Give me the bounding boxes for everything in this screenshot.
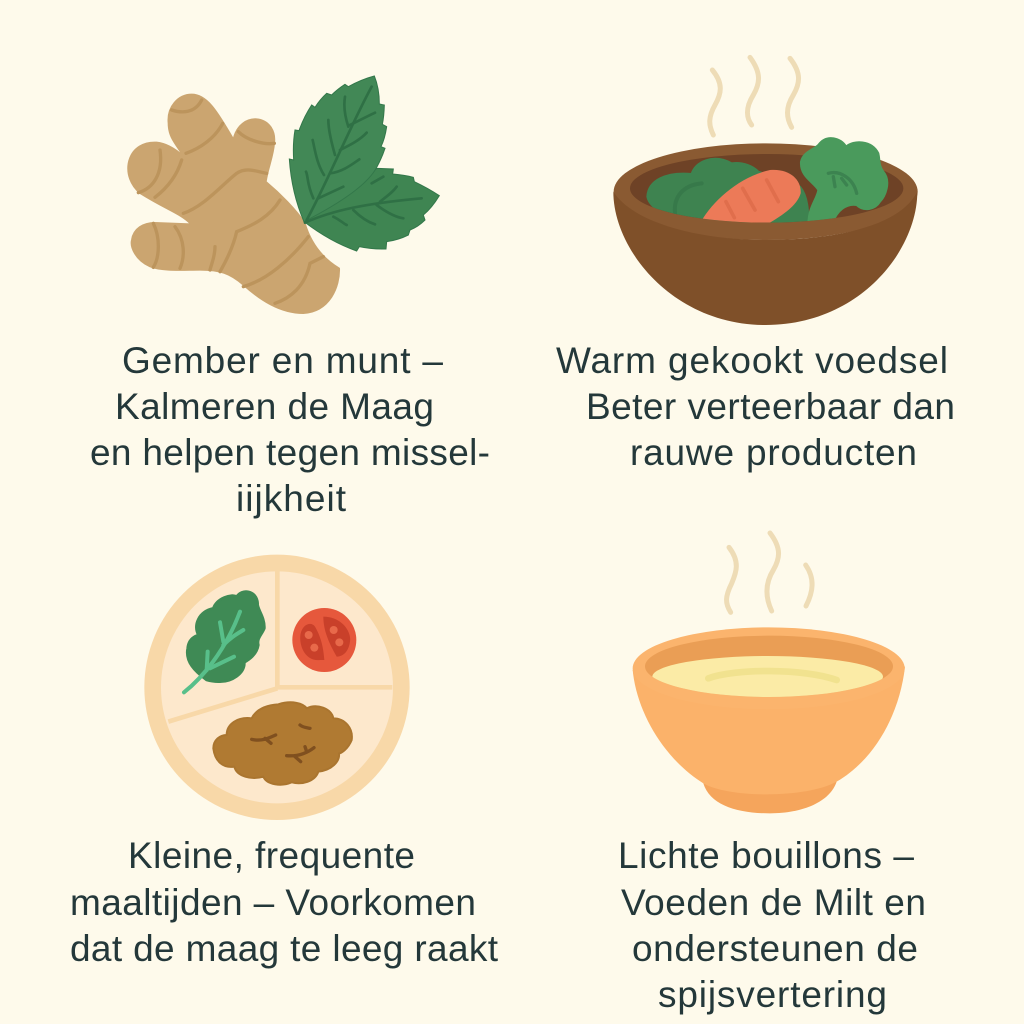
foot <box>703 782 837 813</box>
leaf <box>184 592 264 692</box>
plate <box>144 555 410 820</box>
broth <box>652 656 883 697</box>
text: ginger and mint: iijkheit <box>236 478 347 519</box>
mint leaves <box>289 76 439 251</box>
text: light broths <box>618 835 926 1015</box>
icon: bowl of warm cooked food <box>613 57 918 325</box>
bowl body <box>613 192 917 325</box>
text: warm cooked food <box>556 340 955 473</box>
text: ginger and mint: en helpen tegen missel- <box>90 432 490 473</box>
rim and inside <box>633 627 905 709</box>
text: small frequent meals <box>70 835 499 969</box>
ginger root <box>128 94 339 313</box>
text: light broths: Lichte bouillons – <box>618 835 914 876</box>
text: ginger and mint: Kalmeren de Maag <box>115 386 434 427</box>
steam <box>710 57 799 135</box>
steam <box>727 533 812 612</box>
icon: ginger and mint <box>128 76 439 313</box>
text: light broths: ondersteunen de <box>632 928 918 969</box>
body <box>633 667 905 794</box>
text: small frequent meals: maaltijden – Voorkomen <box>70 882 476 923</box>
text: small frequent meals: dat de maag te leeg raakt <box>70 928 499 969</box>
text: light broths: spijsvertering <box>658 974 887 1015</box>
text: small frequent meals: Kleine, frequente <box>128 835 415 876</box>
ground meat <box>213 702 352 785</box>
text: light broths: Voeden de Milt en <box>621 882 926 923</box>
bowl back and rim <box>614 143 918 240</box>
text: warm cooked food: rauwe producten <box>630 432 917 473</box>
icon: bowl of light broth <box>633 533 905 813</box>
text: ginger and mint <box>90 340 490 519</box>
text: ginger and mint: Gember en munt – <box>122 340 443 381</box>
text: warm cooked food: Warm gekookt voedsel <box>556 340 948 381</box>
text: warm cooked food: Beter verteerbaar dan <box>586 386 955 427</box>
icon: divided plate <box>144 555 410 820</box>
tomato <box>292 608 356 672</box>
vegetables <box>647 138 887 225</box>
